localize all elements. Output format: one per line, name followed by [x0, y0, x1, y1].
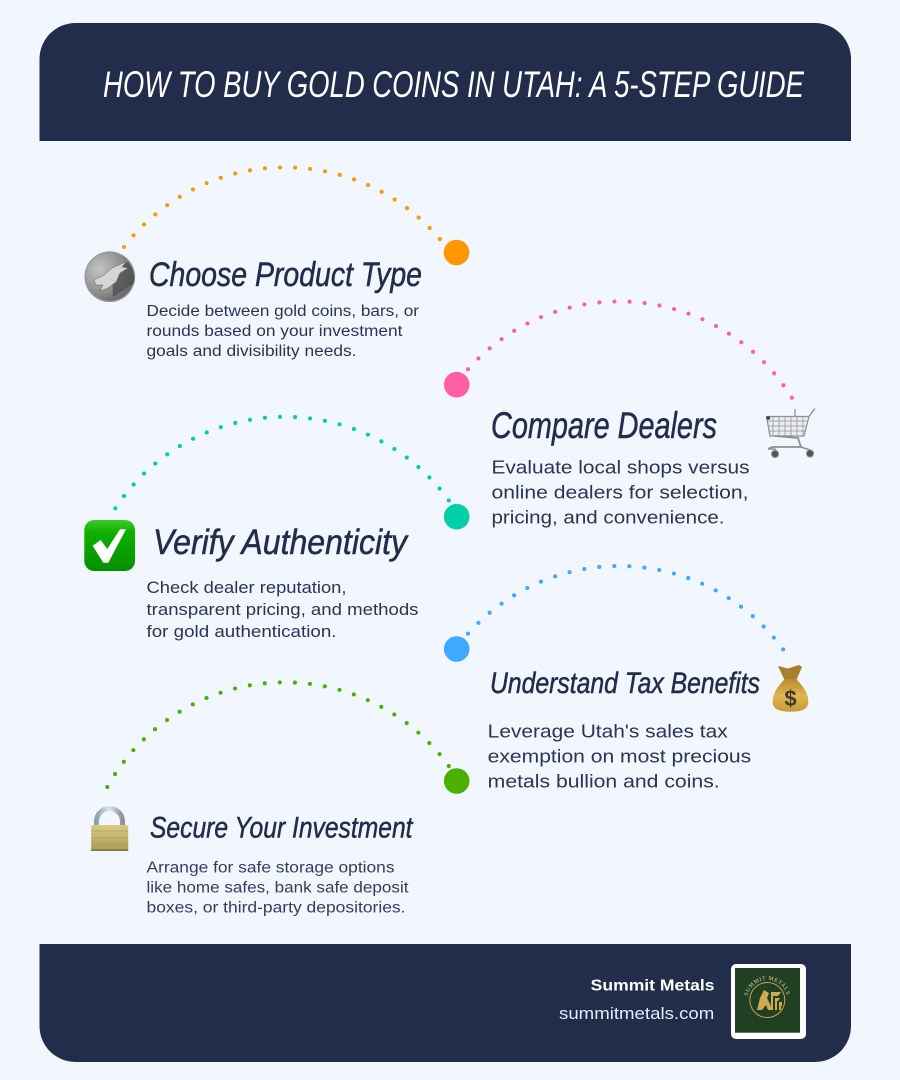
step 5: secure your investment: [91, 682, 470, 916]
icon: money bag: [773, 665, 808, 712]
step 3: verify authenticity: [84, 417, 470, 641]
step 2: compare dealers: [444, 301, 815, 528]
description: metals bullion and coins.: [488, 770, 720, 792]
description: exemption on most precious: [488, 746, 751, 766]
description: Leverage Utah's sales tax: [488, 720, 729, 742]
description: Arrange for safe storage options: [146, 860, 395, 876]
description: [492, 456, 750, 528]
dotted arc 4: [468, 566, 783, 650]
brand name: Summit Metals: [591, 978, 715, 995]
footer banner: [40, 944, 851, 1062]
header banner: [40, 23, 851, 141]
pink node: [444, 372, 470, 398]
heading: Choose Product Type: [149, 256, 422, 294]
description: [146, 303, 419, 360]
logo: SUMMIT METALS: [744, 976, 790, 996]
description: transparent pricing, and methods: [146, 601, 418, 619]
description: [488, 720, 751, 792]
dotted arc 2: [468, 301, 792, 398]
icon: money bag: $: [784, 686, 797, 711]
icon: shopping cart: [766, 408, 815, 458]
description: online dealers for selection,: [492, 482, 748, 502]
step 1: choose product type: [84, 167, 469, 360]
heading: Compare Dealers: [491, 405, 717, 446]
logo: [731, 964, 806, 1039]
heading: Verify Authenticity: [153, 523, 409, 562]
description: Evaluate local shops versus: [492, 456, 750, 478]
description: goals and divisibility needs.: [146, 343, 356, 360]
step 4: understand tax benefits: [444, 566, 808, 792]
dotted arc 1: [124, 167, 440, 247]
green node: [444, 768, 470, 794]
dotted arc 3: [115, 417, 449, 508]
description: for gold authentication.: [146, 623, 336, 641]
description: Check dealer reputation,: [146, 579, 346, 597]
orange node: [444, 240, 469, 265]
description: boxes, or third-party depositories.: [146, 900, 406, 916]
description: [146, 579, 418, 641]
website: summitmetals.com: [559, 1004, 714, 1023]
description: like home safes, bank safe deposit: [146, 880, 409, 896]
description: pricing, and convenience.: [492, 506, 724, 528]
dotted arc 5: [107, 682, 449, 787]
teal node: [444, 504, 470, 530]
heading: Secure Your Investment: [150, 811, 414, 844]
description: rounds based on your investment: [146, 323, 403, 340]
icon: silver coin: [84, 251, 135, 302]
heading: Understand Tax Benefits: [490, 667, 760, 700]
icon: check mark: [84, 520, 135, 571]
blue node: [444, 636, 470, 662]
description: Decide between gold coins, bars, or: [146, 303, 419, 320]
description: [146, 860, 409, 916]
icon: padlock: [91, 809, 128, 851]
